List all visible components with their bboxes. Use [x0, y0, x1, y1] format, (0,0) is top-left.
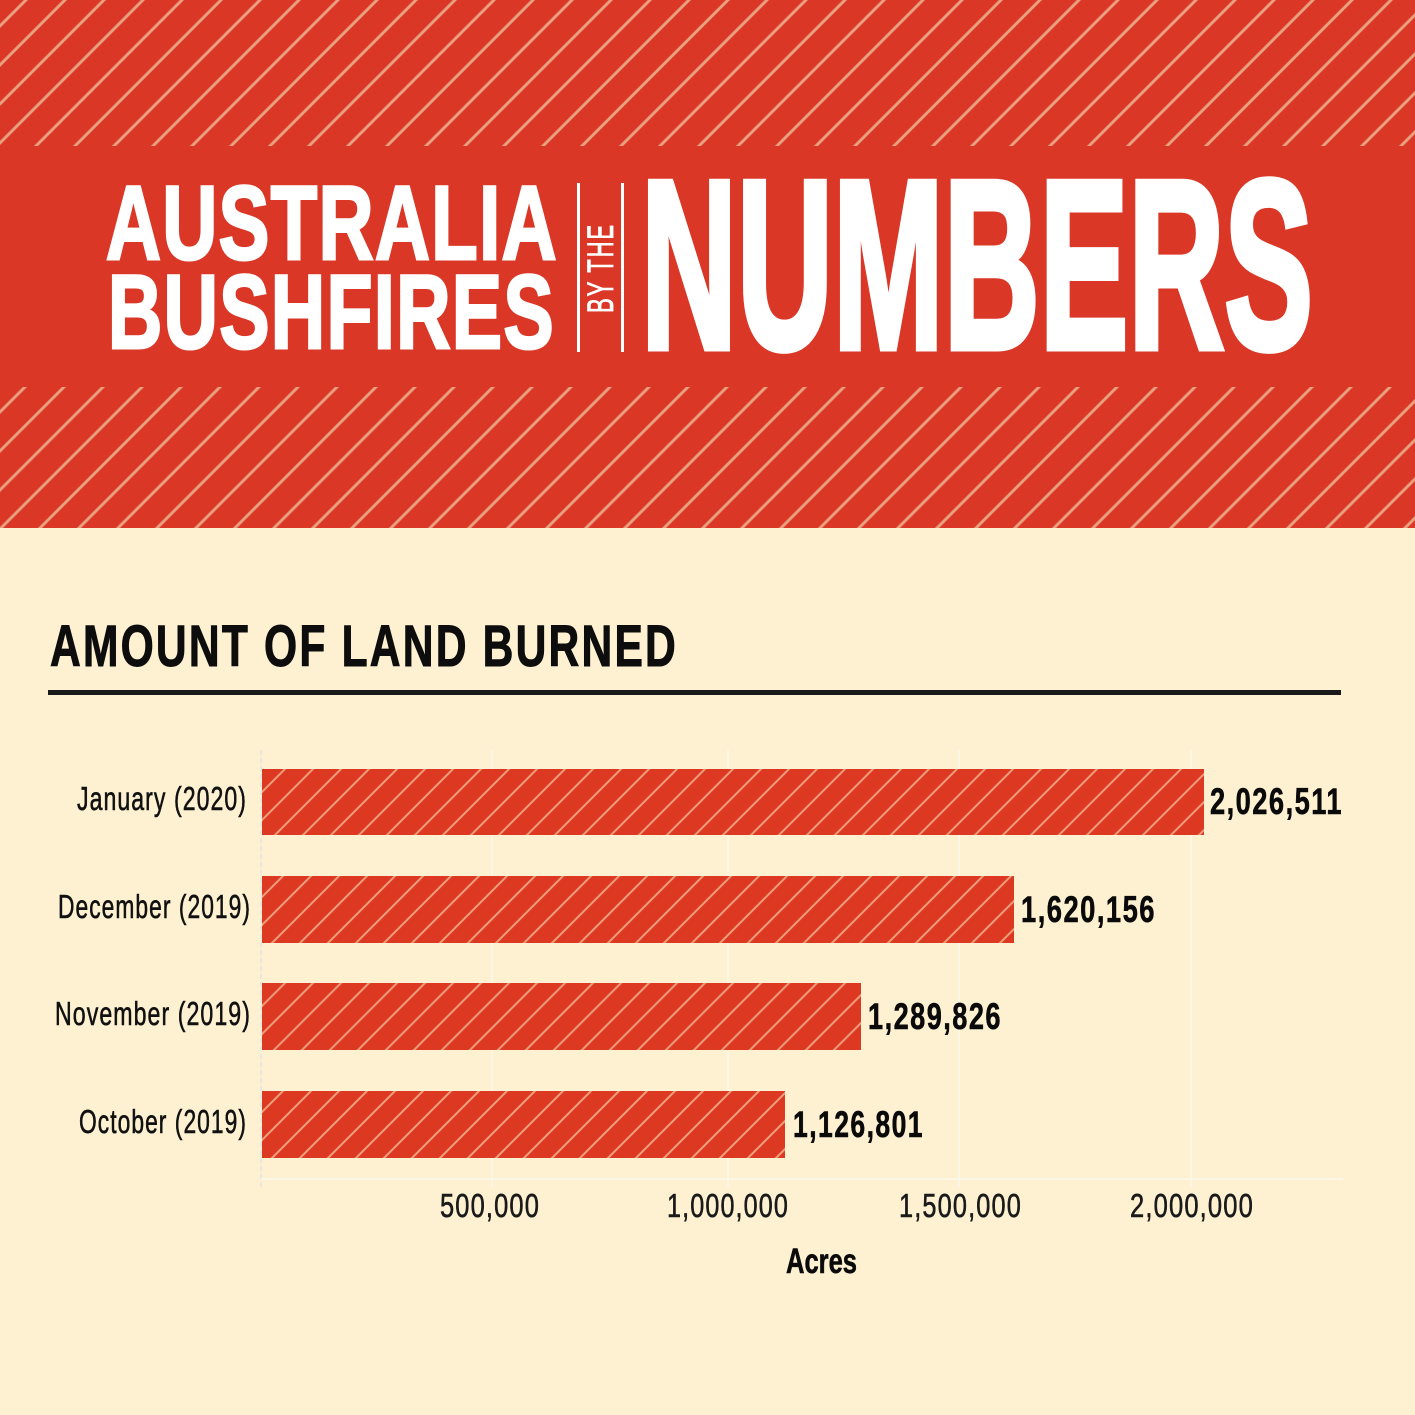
title: Australia Bushfires: BUSHFIRES [108, 254, 555, 371]
bar chart: land burned by month [55, 750, 1343, 1281]
heading rule [48, 690, 1341, 695]
bar: October 2019: October (2019) [79, 1103, 247, 1140]
bar: December 2019 [58, 876, 1156, 943]
bar: December 2019: December (2019) [58, 888, 251, 925]
x-axis tick labels: 2,000,000 [1130, 1187, 1254, 1224]
bar: January 2020: January (2020) [77, 780, 247, 817]
bar: January 2020 [77, 769, 1343, 835]
panel: red header banner [0, 0, 1415, 528]
title: by the, between two rules [577, 183, 624, 352]
x-axis tick labels: 1,500,000 [899, 1187, 1022, 1224]
chart gridlines and axis [261, 750, 1343, 1190]
bar: November 2019: 1,289,826 [868, 996, 1002, 1037]
title: Australia Bushfires [106, 165, 558, 371]
bar: October 2019: 1,126,801 [793, 1104, 924, 1145]
bar: November 2019 [55, 983, 1002, 1050]
x-axis tick labels [440, 1187, 1254, 1224]
x-axis tick labels: 1,000,000 [667, 1187, 789, 1224]
x-axis tick labels: 500,000 [440, 1187, 540, 1224]
x-axis title: Acres [786, 1242, 857, 1281]
bar: December 2019: 1,620,156 [1021, 889, 1156, 930]
bar: October 2019 [79, 1091, 924, 1158]
title: Australia Bushfires: AUSTRALIA [106, 165, 558, 282]
bar: January 2020: 2,026,511 [1210, 781, 1343, 822]
title: by the, between two rules: BY THE [580, 223, 621, 313]
bar: November 2019: November (2019) [55, 995, 251, 1032]
heading: Amount of land burned: AMOUNT OF LAND BURNED [50, 614, 678, 679]
